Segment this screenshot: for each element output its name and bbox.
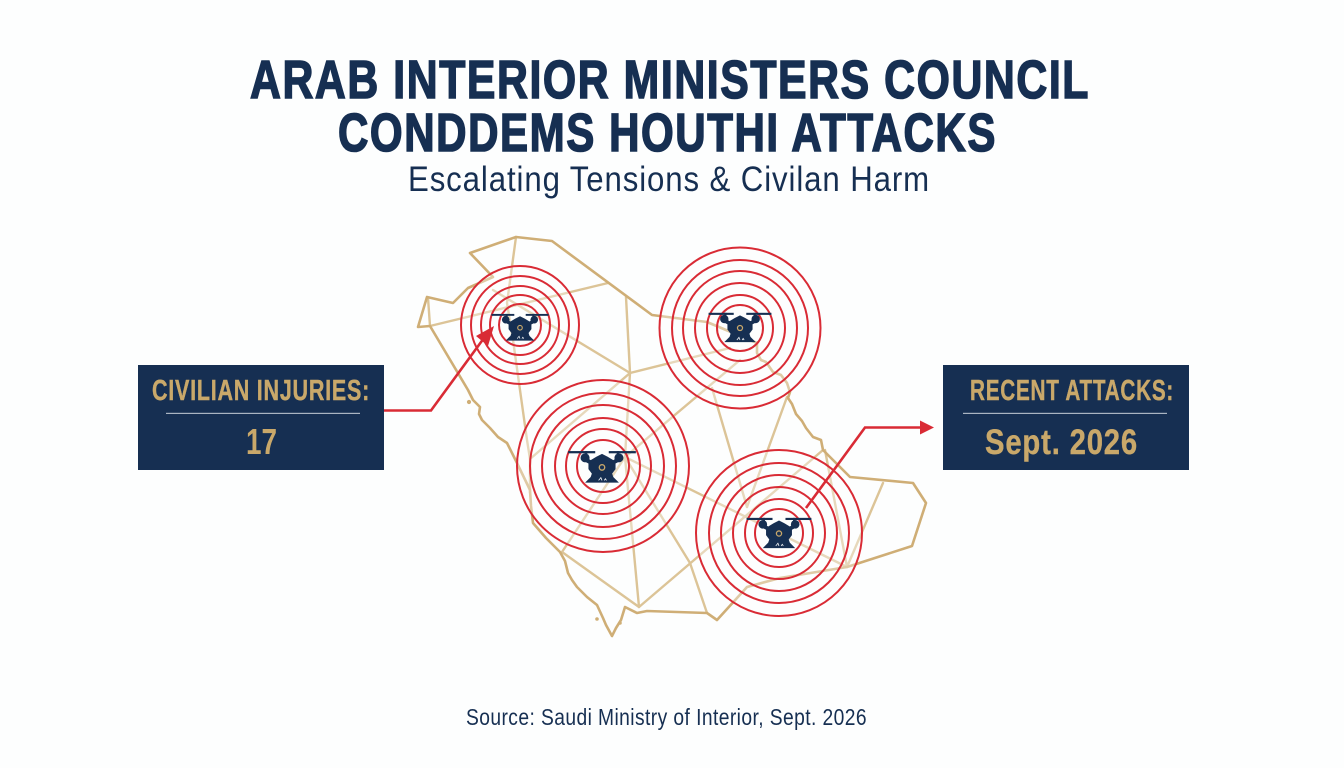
arrow: civilian injuries to north-west target [384, 326, 494, 410]
label: recent attacks: RECENT ATTACKS: [970, 375, 1174, 407]
value: Sept. 2026: Sept. 2026 [985, 423, 1138, 462]
value: 17: 17 [246, 421, 277, 462]
impact rings: north-west [461, 266, 579, 384]
map: internal border network [428, 237, 883, 613]
source note: Source: Saudi Ministry of Interior, Sept. 2026 [466, 704, 867, 730]
icon: drone centre-west [568, 451, 636, 483]
title: ARAB INTERIOR MINISTERS COUNCIL [250, 50, 1090, 110]
label: civilian injuries: CIVILIAN INJURIES: [152, 375, 370, 407]
arrow: south-east target to recent attacks [806, 420, 934, 508]
map: outer border [418, 237, 926, 636]
panel: civilian injuries [138, 365, 384, 470]
impact rings: south-east [696, 450, 862, 616]
map: Arabian peninsula [418, 237, 926, 636]
icon: drone south-east [747, 518, 811, 548]
subtitle: Escalating Tensions & Civilan Harm [408, 160, 930, 199]
impact rings: centre-west [517, 380, 689, 552]
icon: drone north-west [491, 314, 549, 341]
title: CONDDEMS HOUTHI ATTACKS [338, 103, 997, 163]
title [250, 50, 1090, 163]
impact rings: north-east [660, 248, 820, 408]
panel: recent attacks [943, 365, 1189, 470]
map: small islands [467, 400, 621, 624]
icon: drone north-east [709, 313, 771, 342]
